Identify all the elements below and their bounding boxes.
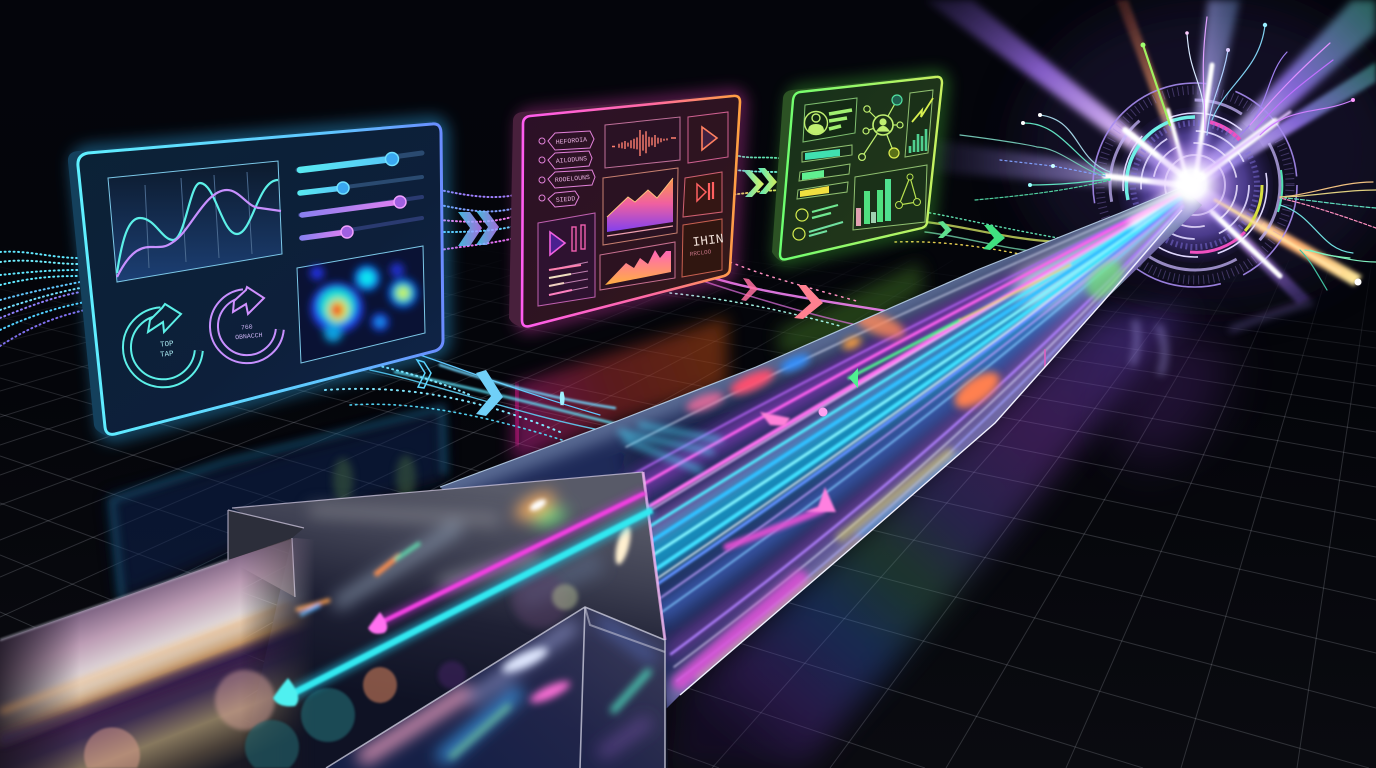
glass beam [440,188,1202,715]
circular arrow: branch: 760 [241,324,253,332]
data stream: pink panel to green panel with chevrons [730,155,790,197]
line chart [108,161,282,282]
label box: IHIN [692,231,724,250]
glass prism foreground [326,607,665,768]
panel: green profile network [772,75,942,262]
play pause box [683,172,722,217]
tag list: SIEDD [556,195,576,204]
tag list [539,131,595,207]
burst: concentric rings [1093,83,1297,287]
reflection: beam on floor [670,302,1312,768]
circular arrow: top tap: TAP [160,350,174,360]
reflection: pink panel on floor [513,317,727,462]
profile card [803,98,857,142]
waveform [605,117,680,168]
data stream: green panel into beam [895,212,1070,258]
burst: bright ray cores [1105,65,1340,276]
burst: core flash [1130,138,1238,230]
user rows [793,205,843,240]
reflection: blue panel on floor [108,408,445,600]
small area chart [600,242,675,290]
circular arrow: branch: OBNACCH [235,332,263,341]
label box [682,219,724,277]
sliders [298,152,422,238]
circular arrow: top tap [123,304,202,387]
progress bars [797,145,852,199]
data stream: blue panel to pink panel with chevrons [440,190,515,250]
tag list: AILODUNS [556,155,587,165]
light trails: magenta and cyan [273,493,652,706]
glass arrow wing [228,472,668,768]
bokeh lights [84,572,578,768]
data stream entering blue panel [0,252,85,346]
burst: back rays [925,0,1376,304]
data stream: blue panel into beam [290,345,620,440]
tag list: HEFOROIA [556,136,587,146]
play button box [688,112,728,163]
panel: pink media [509,94,740,328]
floor grid [0,264,1376,768]
network graph [859,95,903,160]
trend chart [905,90,933,157]
label box: RRCLOO [689,248,712,258]
burst: light filaments [960,17,1376,290]
bar chart [853,165,927,230]
circular arrow: top tap: TOP [160,340,174,350]
heatmap [297,246,425,363]
tag list: ROOELOUNS [555,174,590,184]
area chart [603,168,678,245]
reflection: green panel on floor [768,262,924,360]
media player box [538,213,595,306]
data stream: pink panel into beam [670,262,905,330]
circular arrow: branch [211,287,283,362]
glass bar foreground [0,520,320,768]
panel: blue analytics [68,121,443,437]
